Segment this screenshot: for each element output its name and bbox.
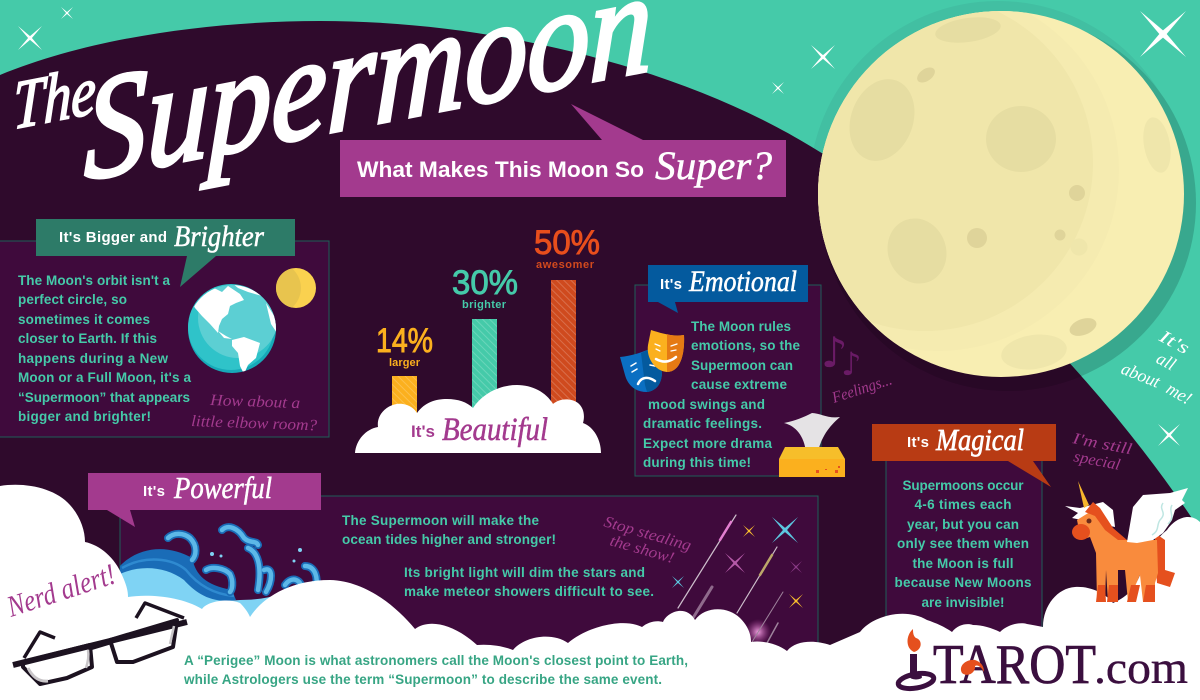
body text: emotional: dramatic feelings. bbox=[643, 416, 762, 431]
icon: candle bbox=[897, 629, 935, 691]
banner: powerful bbox=[88, 470, 321, 527]
perigee note: while Astrologers use the term “Supermoon” to describe the same event. bbox=[183, 672, 662, 687]
body bbox=[1077, 510, 1158, 602]
icon: ocean wave bbox=[120, 527, 318, 640]
panel: powerful bbox=[88, 470, 818, 656]
body text: emotional: mood swings and bbox=[648, 397, 765, 412]
body text: emotional: cause extreme bbox=[691, 377, 787, 392]
body text: emotional: Supermoon can bbox=[691, 358, 793, 373]
cloud: it's beautiful: Beautiful bbox=[442, 412, 548, 448]
meteor shower and stars bbox=[672, 515, 803, 645]
bar: brighter: brighter bbox=[462, 299, 507, 311]
banner: magical bbox=[872, 422, 1056, 487]
logo: tarot.com: TAROT bbox=[933, 634, 1096, 696]
eye bbox=[1086, 518, 1092, 524]
handwritten note: all about me: all bbox=[1153, 348, 1179, 374]
perigee note: A “Perigee” Moon is what astronomers call the Moon's closest point to Earth, bbox=[184, 653, 688, 668]
moon rear shadow ring bbox=[820, 15, 1196, 391]
handwritten note: elbow room: little elbow room? bbox=[191, 413, 317, 434]
banner: bigger and brighter: Brighter bbox=[174, 220, 264, 253]
icon: small moon bbox=[276, 268, 316, 308]
body text: powerful: The Supermoon will make the bbox=[342, 513, 539, 528]
icon: theatre masks bbox=[620, 330, 684, 392]
perigee note bbox=[183, 653, 688, 687]
full moon bbox=[818, 11, 1184, 377]
logo: tarot.com: .com bbox=[1094, 642, 1188, 693]
snout bbox=[1072, 524, 1090, 540]
icon: logo flame bbox=[961, 660, 984, 675]
handwritten note: still special: special bbox=[1072, 448, 1122, 474]
handwritten note: elbow room: How about a bbox=[209, 392, 300, 412]
banner: magical: Magical bbox=[935, 422, 1024, 457]
handwritten note: elbow room bbox=[191, 392, 317, 434]
callout: what makes this moon so super: Super? bbox=[655, 143, 772, 188]
white clouds along the bottom bbox=[0, 485, 1200, 700]
small far wing bbox=[1065, 502, 1115, 527]
cloud: it's beautiful bbox=[355, 385, 601, 453]
horn bbox=[1078, 481, 1089, 508]
body text: emotional: The Moon rules bbox=[691, 319, 791, 334]
bar: larger: 14% bbox=[376, 322, 433, 360]
body text: magical: because New Moons bbox=[894, 575, 1032, 590]
banner: emotional bbox=[648, 265, 808, 313]
icon: unicorn bbox=[1065, 481, 1188, 602]
bar: larger bbox=[376, 322, 433, 426]
body text: magical bbox=[894, 478, 1032, 610]
handwritten note: stop stealing the show bbox=[602, 514, 693, 567]
panel: bigger and brighter bbox=[0, 219, 329, 437]
icon: music notes bbox=[821, 328, 861, 383]
body text: bigger and brighter: sometimes it comes bbox=[18, 312, 150, 327]
icon: music notes: ♪ bbox=[841, 345, 861, 383]
banner: magical: It's bbox=[907, 434, 929, 451]
bar: larger: larger bbox=[389, 357, 421, 369]
body text: bigger and brighter: bigger and brighter! bbox=[18, 409, 151, 424]
body text: magical: Supermoons occur bbox=[902, 478, 1024, 493]
body text: bigger and brighter: “Supermoon” that appears bbox=[18, 390, 190, 405]
body text: magical: the Moon is full bbox=[912, 556, 1014, 571]
bar: brighter bbox=[452, 264, 518, 419]
handwritten note: stop stealing the show: Stop stealing bbox=[602, 514, 693, 555]
body text: bigger and brighter bbox=[18, 273, 191, 424]
bar: awesomer bbox=[534, 224, 600, 415]
banner: powerful: Powerful bbox=[173, 470, 272, 505]
handwritten note: all about me bbox=[1119, 325, 1196, 408]
logo: tarot.com bbox=[897, 629, 1188, 696]
body text: magical: only see them when bbox=[897, 536, 1029, 551]
body text: powerful: make meteor showers difficult to see. bbox=[404, 584, 654, 599]
icon: music notes: ♪ bbox=[821, 328, 848, 377]
body text: bigger and brighter: perfect circle, so bbox=[18, 292, 127, 307]
mane bbox=[1085, 502, 1127, 540]
body text: magical: 4-6 times each bbox=[914, 497, 1012, 512]
panel: emotional bbox=[620, 265, 845, 477]
bar: awesomer: awesomer bbox=[536, 259, 595, 271]
banner: powerful: It's bbox=[143, 483, 165, 500]
panel: magical bbox=[872, 422, 1056, 645]
cloud: it's beautiful: It's bbox=[411, 422, 435, 441]
icon: tissue box bbox=[779, 413, 845, 477]
icon: earth bbox=[188, 278, 278, 374]
body text: emotional: Expect more drama bbox=[643, 436, 772, 451]
handwritten note: nerd alert: Nerd alert! bbox=[2, 558, 120, 624]
title: The bbox=[13, 51, 97, 144]
body text: bigger and brighter: The Moon's orbit isn't a bbox=[18, 273, 170, 288]
handwritten note: stop stealing the show: the show! bbox=[608, 533, 676, 567]
icon: glasses bbox=[13, 603, 187, 684]
body text: magical: year, but you can bbox=[907, 517, 1019, 532]
body text: powerful: ocean tides higher and stronger! bbox=[342, 532, 556, 547]
large wing bbox=[1127, 488, 1188, 543]
bar: awesomer: 50% bbox=[534, 224, 600, 262]
body text: bigger and brighter: happens during a New bbox=[18, 351, 168, 366]
sky stars bbox=[18, 7, 1186, 446]
handwritten note: still special: I'm still bbox=[1070, 430, 1134, 459]
moon halo ring bbox=[809, 1, 1187, 379]
body text: magical: are invisible! bbox=[922, 595, 1004, 610]
handwritten note: all about me: me! bbox=[1163, 378, 1196, 408]
body text: bigger and brighter: closer to Earth. If this bbox=[18, 331, 157, 346]
handwritten note: feelings: Feelings... bbox=[829, 371, 894, 407]
tail bbox=[1155, 533, 1175, 587]
callout: what makes this moon so super bbox=[340, 104, 786, 197]
bar chart: it's beautiful bbox=[355, 224, 601, 453]
callout: what makes this moon so super: What Makes This Moon So bbox=[357, 157, 644, 182]
banner: emotional: It's bbox=[660, 276, 682, 293]
hooves bbox=[1096, 585, 1155, 602]
body text: powerful bbox=[342, 513, 654, 599]
handwritten note: all about me: about bbox=[1119, 358, 1164, 392]
body text: bigger and brighter: Moon or a Full Moon, it's a bbox=[18, 370, 191, 385]
handwritten note: still special bbox=[1070, 430, 1134, 474]
moon shadow on night sky bbox=[1070, 364, 1082, 376]
handwritten note: all about me: It's bbox=[1155, 325, 1193, 358]
body text: emotional: during this time! bbox=[643, 455, 751, 470]
body text: powerful: Its bright light will dim the stars and bbox=[404, 565, 645, 580]
body text: emotional: emotions, so the bbox=[691, 338, 800, 353]
body text: emotional bbox=[643, 319, 800, 470]
bar: brighter: 30% bbox=[452, 264, 518, 302]
banner: bigger and brighter: It's Bigger and bbox=[59, 229, 167, 246]
banner: bigger and brighter bbox=[36, 219, 295, 287]
banner: emotional: Emotional bbox=[688, 265, 797, 298]
